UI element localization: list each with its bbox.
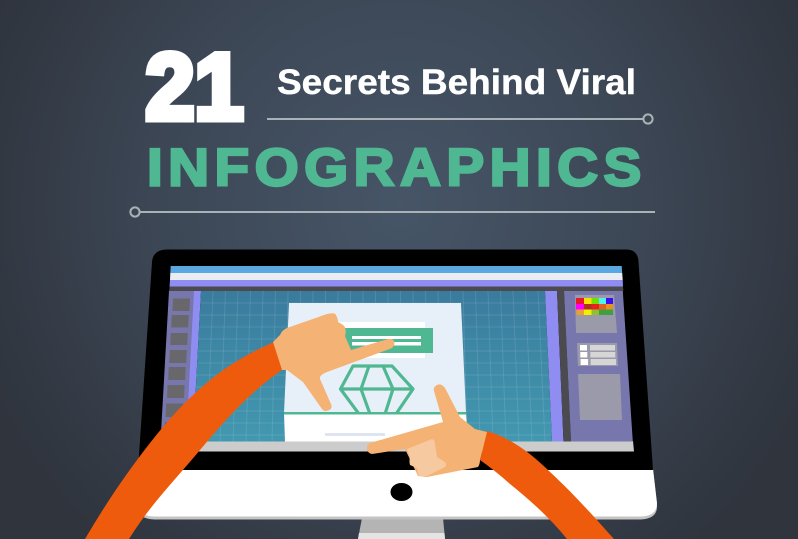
right arm [367, 384, 614, 539]
curled fingers [407, 439, 446, 476]
preview box [578, 374, 622, 420]
title: INFOGRAPHICS: INFOGRAPHICS [147, 137, 641, 197]
colour palette [575, 295, 617, 333]
layers list [577, 343, 618, 366]
caption line [325, 433, 385, 436]
toolbar stripes [169, 266, 623, 291]
left tool panel [160, 291, 201, 442]
tool thumbnails [164, 298, 190, 435]
right side strips [545, 291, 571, 442]
divider with circle: upper [267, 114, 653, 124]
monitor chin [137, 469, 657, 520]
bottom status bar [160, 441, 634, 452]
right sleeve [480, 431, 614, 539]
camera button [390, 483, 412, 501]
left arm [85, 313, 394, 539]
design canvas with grid [190, 291, 560, 442]
monitor screen [160, 266, 634, 452]
title: number 21: 21 [146, 34, 243, 139]
monitor bezel [138, 250, 653, 470]
left hand [273, 313, 394, 411]
left sleeve [85, 342, 282, 539]
divider with circle: lower [130, 207, 655, 217]
icon: diamond [340, 366, 413, 414]
banner [337, 322, 433, 358]
monitor stand [358, 518, 445, 539]
infographic document [284, 303, 468, 442]
right tool panel [564, 291, 633, 442]
right hand [367, 384, 487, 477]
monitor body [137, 250, 657, 520]
title: Secrets Behind Viral: Secrets Behind Viral [277, 63, 636, 102]
